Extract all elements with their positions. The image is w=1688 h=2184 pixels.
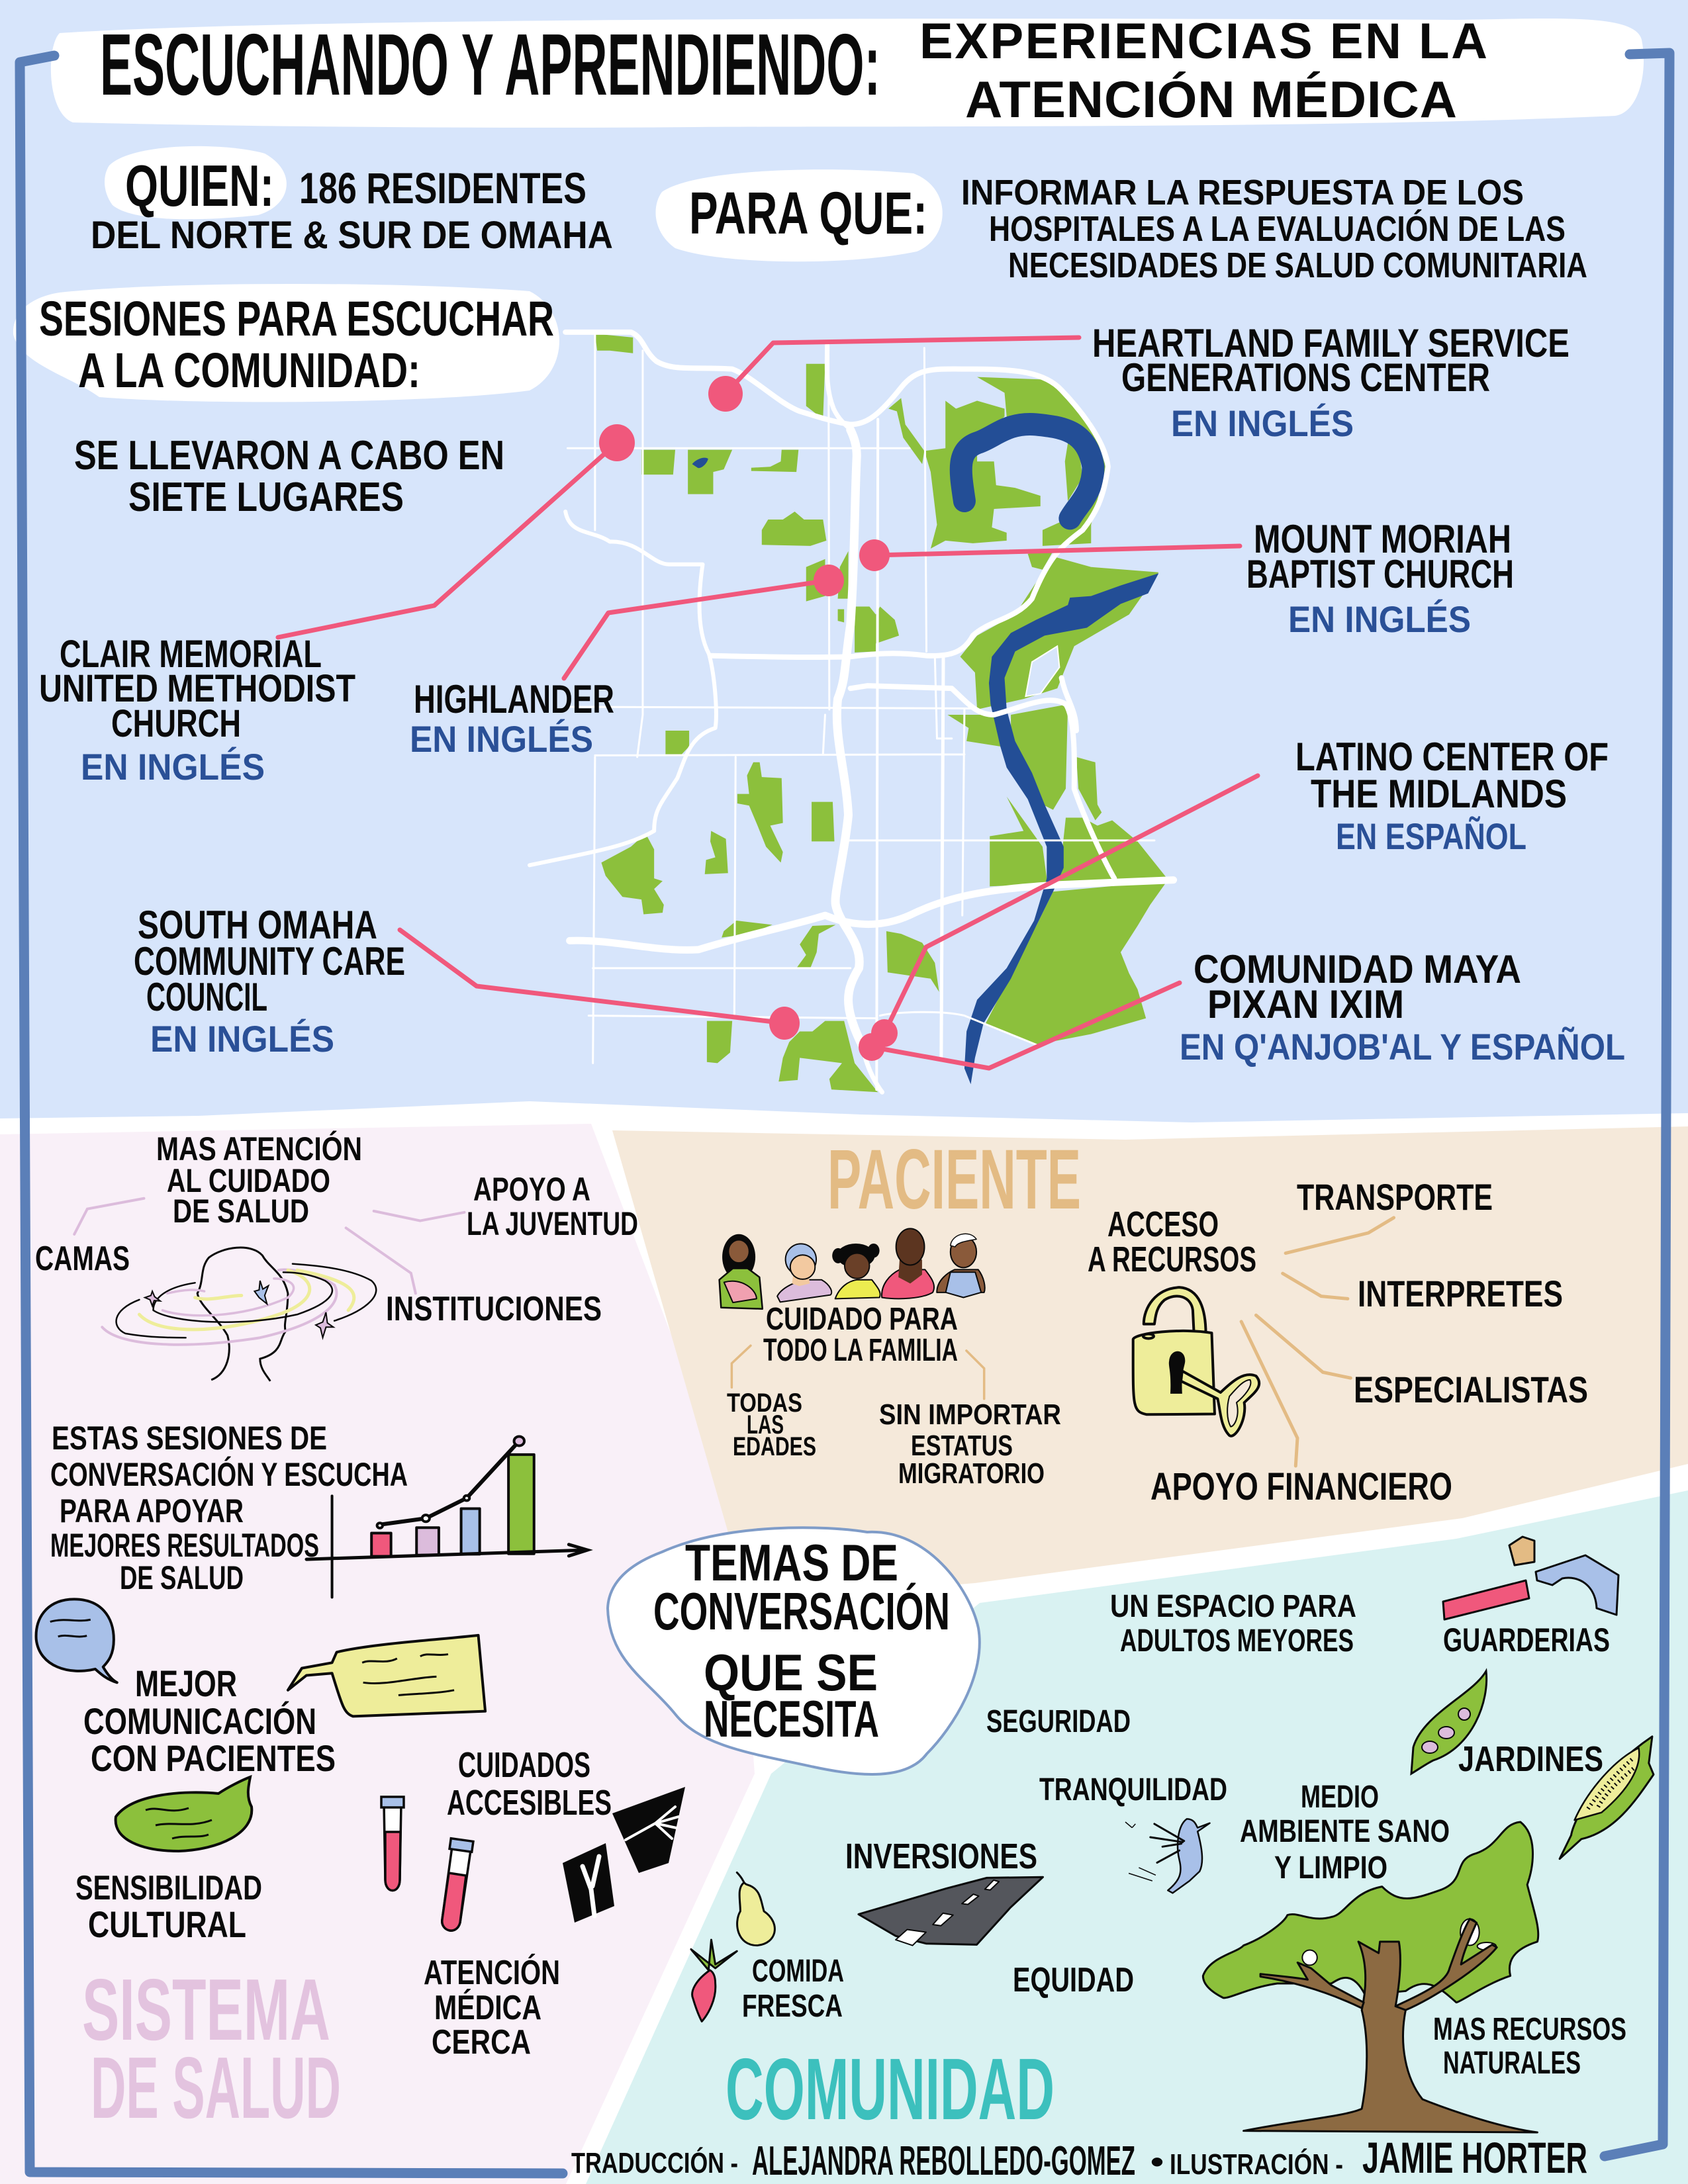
credits: ALEJANDRA REBOLLEDO-GOMEZ — [752, 2138, 1135, 2184]
map location leader lines — [278, 338, 1258, 1068]
comunidad labels: UN ESPACIO PARA — [1110, 1589, 1356, 1624]
label: Clair Memorial: EN INGLÉS — [81, 746, 265, 788]
river — [961, 424, 1093, 518]
credits: • — [1150, 2144, 1164, 2179]
icon: tree — [1203, 1822, 1538, 2132]
comunidad labels — [742, 1589, 1626, 2081]
sistema de salud labels: DE SALUD — [173, 1193, 309, 1230]
text: cuidados accesibles: ACCESIBLES — [447, 1783, 612, 1823]
sesiones heading — [39, 291, 554, 398]
para que text: HOSPITALES A LA EVALUACIÓN DE LAS — [989, 209, 1566, 249]
label: Latino Center: EN ESPAÑOL — [1336, 815, 1526, 857]
label: Latino Center: LATINO CENTER OF — [1295, 735, 1609, 779]
speech bubbles: blue and yellow — [36, 1599, 485, 1716]
title: ESCUCHANDO Y APRENDIENDO: — [100, 16, 880, 113]
text: atencion medica cerca: ATENCIÓN — [424, 1954, 560, 1992]
text: sensibilidad cultural: SENSIBILIDAD — [75, 1869, 262, 1907]
comunidad labels: GUARDERIAS — [1443, 1621, 1610, 1659]
title: ATENCIÓN MÉDICA — [965, 70, 1457, 128]
panel: comunidad background — [586, 1490, 1688, 2184]
label: Comunidad Maya: PIXAN IXIM — [1207, 982, 1404, 1026]
icon: x-rays — [563, 1787, 685, 1923]
text: atencion medica cerca: CERCA — [432, 2023, 531, 2062]
map of Omaha — [530, 332, 1174, 1092]
panel: paciente background — [612, 1126, 1688, 1602]
comunidad labels: ADULTOS MEYORES — [1120, 1623, 1354, 1659]
sistema de salud labels: MAS ATENCIÓN — [156, 1130, 362, 1167]
label: Clair Memorial: UNITED METHODIST — [39, 667, 355, 710]
icon: road — [859, 1877, 1043, 1946]
tan connector lines — [731, 1218, 1394, 1466]
label: Latino Center: THE MIDLANDS — [1311, 772, 1567, 816]
paciente labels: ESPECIALISTAS — [1354, 1369, 1588, 1410]
label: Comunidad Maya: EN Q'ANJOB'AL Y ESPAÑOL — [1180, 1026, 1625, 1068]
label: Clair Memorial: CHURCH — [111, 702, 241, 745]
icon: pea pod — [1411, 1671, 1487, 1774]
text: estas sesiones: CONVERSACIÓN Y ESCUCHA — [50, 1456, 408, 1493]
text: cuidados accesibles: CUIDADOS — [458, 1745, 590, 1785]
label: Mount Moriah: EN INGLÉS — [1288, 598, 1471, 640]
sistema de salud labels: LA JUVENTUD — [467, 1205, 638, 1242]
text: atencion medica cerca: MÉDICA — [434, 1989, 541, 2027]
family care labels: CUIDADO PARA — [766, 1302, 958, 1337]
label: Mount Moriah: MOUNT MORIAH — [1254, 517, 1511, 561]
family care labels: LAS — [747, 1410, 784, 1439]
comunidad labels: EQUIDAD — [1013, 1961, 1134, 1999]
siete lugares text: SE LLEVARON A CABO EN — [74, 433, 504, 478]
text: sensibilidad cultural: CULTURAL — [88, 1903, 246, 1945]
family care labels: TODAS — [727, 1388, 802, 1418]
para que blob — [655, 169, 943, 261]
sistema de salud labels: APOYO A — [473, 1171, 590, 1208]
speech bubble: green — [116, 1777, 252, 1851]
center bubble: temas de conversacion: NECESITA — [704, 1690, 879, 1748]
para que text — [689, 173, 1587, 285]
label: South Omaha: SOUTH OMAHA — [138, 903, 377, 947]
title: EXPERIENCIAS EN LA — [919, 13, 1487, 69]
label: Comunidad Maya: COMUNIDAD MAYA — [1194, 947, 1521, 991]
sistema de salud labels — [35, 1130, 638, 1328]
para que text: INFORMAR LA RESPUESTA DE LOS — [961, 173, 1524, 212]
label: Comunidad Maya — [1180, 947, 1625, 1068]
sesiones heading: A LA COMUNIDAD: — [78, 343, 420, 398]
paciente labels: ACCESO — [1107, 1205, 1219, 1244]
label: Highlander: HIGHLANDER — [414, 677, 614, 721]
label: Latino Center — [1295, 735, 1609, 857]
text: mejor comunicacion: CON PACIENTES — [91, 1737, 336, 1779]
comunidad labels: COMIDA — [752, 1954, 844, 1989]
icon: padlock and key — [1133, 1287, 1259, 1436]
heading: sistema de salud: DE SALUD — [91, 2039, 341, 2136]
icon: hummingbird — [1125, 1819, 1210, 1893]
para que text: PARA QUE: — [689, 181, 927, 247]
credits: TRADUCCIÓN - — [571, 2146, 738, 2179]
text: mejor comunicacion — [83, 1662, 336, 1779]
paciente labels: INTERPRETES — [1358, 1273, 1563, 1314]
quien blob — [105, 146, 287, 219]
quien text: 186 RESIDENTES — [299, 163, 586, 212]
text: estas sesiones: MEJORES RESULTADOS — [50, 1527, 319, 1564]
title banner blob — [51, 19, 1644, 128]
quien text: QUIEN: — [125, 153, 274, 218]
comunidad labels: AMBIENTE SANO — [1240, 1814, 1450, 1849]
quien text — [91, 153, 613, 257]
label: South Omaha: COMMUNITY CARE — [134, 939, 405, 983]
bar chart — [306, 1436, 587, 1597]
center bubble: temas de conversacion: TEMAS DE — [685, 1533, 898, 1592]
galaxy head illustration and connectors — [74, 1199, 465, 1381]
icon: five people — [720, 1228, 985, 1309]
sistema de salud labels: INSTITUCIONES — [386, 1290, 602, 1328]
paciente labels: TRANSPORTE — [1297, 1176, 1493, 1218]
label: Mount Moriah — [1246, 517, 1514, 640]
credits: ILUSTRACIÓN - — [1170, 2148, 1343, 2181]
paciente labels — [1088, 1176, 1588, 1508]
comunidad labels: INVERSIONES — [845, 1837, 1037, 1876]
label: South Omaha: EN INGLÉS — [150, 1018, 334, 1060]
label: Heartland: HEARTLAND FAMILY SERVICE — [1092, 321, 1570, 365]
comunidad labels: MAS RECURSOS — [1433, 2012, 1626, 2047]
icon: pear and strawberry — [691, 1872, 774, 2021]
label: Highlander — [410, 677, 614, 760]
comunidad labels: FRESCA — [742, 1989, 843, 2024]
label: Highlander: EN INGLÉS — [410, 718, 593, 760]
family care labels: ESTATUS — [911, 1430, 1013, 1462]
sistema de salud labels: AL CUIDADO — [167, 1162, 330, 1199]
label: Heartland — [1092, 321, 1570, 444]
comunidad labels: Y LIMPIO — [1274, 1850, 1387, 1886]
comunidad labels: JARDINES — [1458, 1739, 1603, 1779]
family care labels: SIN IMPORTAR — [879, 1398, 1061, 1431]
label: Heartland: GENERATIONS CENTER — [1121, 355, 1490, 400]
text: estas sesiones — [50, 1420, 408, 1596]
panel: map background — [0, 0, 1688, 1122]
text: cuidados accesibles — [447, 1745, 612, 1823]
center bubble: temas de conversacion: CONVERSACIÓN — [653, 1582, 950, 1641]
label: South Omaha: COUNCIL — [146, 975, 267, 1019]
comunidad labels: MEDIO — [1301, 1780, 1379, 1815]
roads — [530, 332, 1174, 1092]
paciente labels: A RECURSOS — [1088, 1240, 1256, 1279]
sistema de salud labels: CAMAS — [35, 1240, 130, 1278]
text: sensibilidad cultural — [75, 1869, 262, 1945]
comunidad labels: NATURALES — [1443, 2046, 1581, 2081]
comunidad labels: TRANQUILIDAD — [1039, 1772, 1227, 1807]
center bubble: temas de conversacion: QUE SE — [704, 1643, 878, 1702]
panel: sistema de salud background — [0, 1124, 755, 2184]
text: mejor comunicacion: COMUNICACIÓN — [83, 1700, 316, 1742]
siete lugares text: SIETE LUGARES — [128, 475, 404, 520]
siete lugares text — [74, 433, 504, 520]
family care labels: EDADES — [733, 1432, 816, 1461]
heading: paciente: PACIENTE — [827, 1132, 1081, 1227]
quien text: DEL NORTE & SUR DE OMAHA — [91, 214, 613, 257]
paciente labels: APOYO FINANCIERO — [1150, 1465, 1452, 1508]
comunidad labels: SEGURIDAD — [986, 1704, 1131, 1739]
label: Heartland: EN INGLÉS — [1171, 402, 1354, 444]
family care labels: TODO LA FAMILIA — [763, 1333, 958, 1368]
heading: sistema de salud — [82, 1961, 341, 2136]
label: Mount Moriah: BAPTIST CHURCH — [1246, 552, 1514, 596]
sesiones blob — [13, 284, 559, 402]
heading: comunidad: COMUNIDAD — [726, 2040, 1055, 2138]
text: mejor comunicacion: MEJOR — [135, 1662, 237, 1704]
sesiones heading: SESIONES PARA ESCUCHAR — [39, 291, 554, 346]
credits — [571, 2133, 1587, 2184]
icon: blocks — [1443, 1537, 1618, 1619]
text: estas sesiones: ESTAS SESIONES DE — [52, 1420, 327, 1457]
family care labels: MIGRATORIO — [898, 1457, 1045, 1490]
text: atencion medica cerca — [424, 1954, 560, 2062]
center bubble: temas de conversacion — [608, 1527, 980, 1774]
label: Clair Memorial — [39, 633, 355, 788]
credits: JAMIE HORTER — [1362, 2133, 1587, 2182]
family care labels — [727, 1302, 1061, 1490]
map location pins — [599, 376, 898, 1061]
label: South Omaha — [134, 903, 405, 1060]
heading: sistema de salud: SISTEMA — [82, 1961, 330, 2058]
icon: test tubes — [381, 1797, 473, 1931]
label: Clair Memorial: CLAIR MEMORIAL — [60, 633, 322, 676]
text: estas sesiones: PARA APOYAR — [60, 1492, 244, 1529]
icon: corn — [1560, 1737, 1654, 1859]
text: estas sesiones: DE SALUD — [120, 1559, 244, 1596]
